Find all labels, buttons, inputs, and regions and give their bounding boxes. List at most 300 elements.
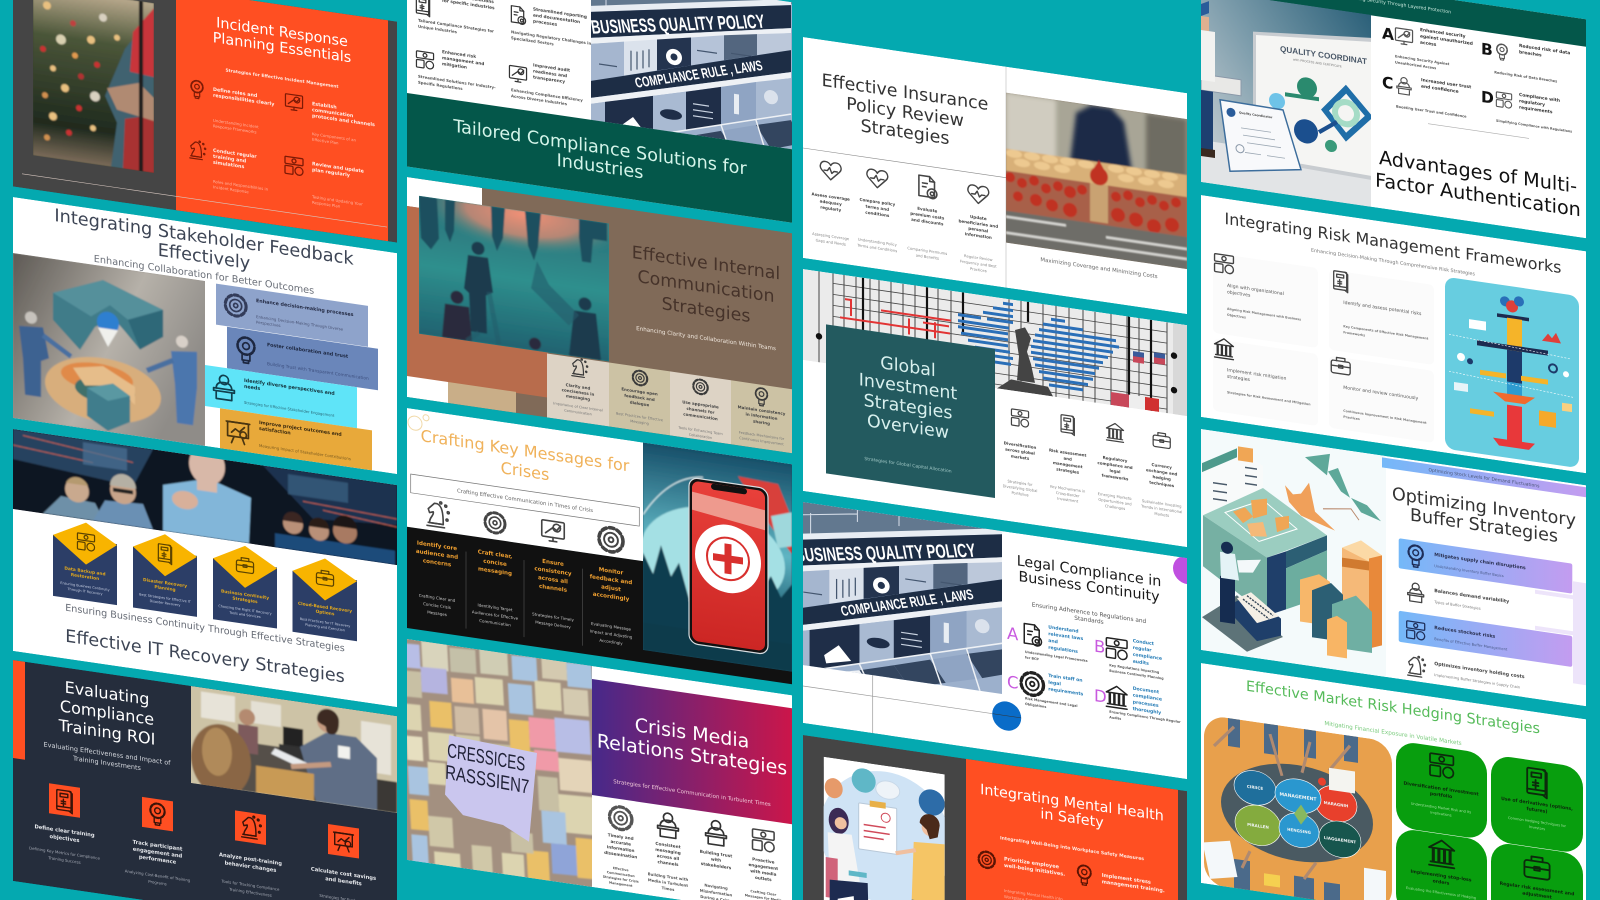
card: feedback: Messaging	[630, 419, 649, 426]
card: channels: Collaboration	[689, 433, 712, 440]
item: specific industries	[416, 0, 495, 40]
subheading: Enhancing Collaboration for Better Outcomes	[94, 254, 314, 297]
icons row	[427, 500, 623, 554]
card: data backup: Through IT Recovery	[66, 587, 103, 596]
item: risk	[1049, 413, 1087, 505]
item: regulatory	[1097, 421, 1133, 512]
title card: Strategies	[864, 391, 952, 424]
card: stop-loss: Implementing stop-loss	[1410, 869, 1472, 884]
item: media: outlets	[755, 875, 772, 882]
card: disaster recovery: Disaster Recovery	[150, 599, 180, 607]
card: identify: Identify and assess potential risks	[1343, 300, 1422, 317]
bar: stockout: Benefits of Effective Buffer Management	[1434, 637, 1508, 652]
item: behavior: Analyze post-training	[219, 852, 282, 867]
bar: supply chain: Mitigates supply chain disruptions	[1434, 552, 1526, 571]
card: stop-loss: Evaluating the Effectiveness of Hedging	[1406, 886, 1476, 900]
heading: Effectively	[158, 241, 250, 274]
item: information: Timely and	[608, 832, 634, 841]
item A: regulations	[1048, 645, 1078, 655]
heading: Buffer Strategies	[1410, 506, 1558, 547]
photo: figures shaking hands over blocks	[13, 253, 205, 446]
item A: A	[1382, 24, 1394, 44]
item: audit	[509, 59, 583, 109]
panel: Effective Internal Communication	[407, 177, 792, 453]
item: roles: Response Frameworks	[213, 123, 256, 135]
photo: team around strategy table: PIRALLEN	[1247, 822, 1269, 830]
subheading: Ensuring Adherence to Regulations and	[1032, 601, 1147, 625]
photo: wall of sticky notes: RASSSIEN7	[445, 762, 530, 799]
item D: Audits	[1109, 715, 1121, 721]
panel: Evaluating Compliance Training ROI	[13, 660, 397, 900]
header strip	[1382, 457, 1586, 497]
column: audience: Concise Crisis	[423, 601, 451, 610]
item A	[1007, 618, 1088, 669]
strip: collaboration	[227, 327, 378, 390]
card: derivatives: Common Hedging Techniques for	[1508, 816, 1567, 828]
subheading: Integrating Well-Being into Workplace Safety Measures	[1000, 835, 1144, 862]
photo: quality coordination certificate: QUALITY COORDINAT	[1280, 45, 1367, 66]
subheading: Training Investments	[72, 754, 142, 772]
subheading box	[411, 474, 639, 526]
photo: quality coordination certificate: Quality Coordinator	[1239, 111, 1273, 119]
item: beneficiaries: Regular Review	[964, 254, 993, 262]
item: training: Incident Response	[213, 184, 249, 194]
item: beneficiaries: Practices	[970, 267, 987, 273]
column: consistency	[532, 556, 574, 630]
item: stakeholders	[700, 818, 733, 900]
card: clarity: conciseness in	[562, 387, 595, 397]
subheading: Standards	[1074, 615, 1104, 626]
item: diversification	[1003, 408, 1037, 499]
item: communication: Key Components of an	[312, 131, 357, 143]
item B: audits	[1133, 659, 1149, 667]
column: messaging	[472, 547, 519, 629]
heading: Integrating Stakeholder Feedback	[54, 206, 354, 270]
card: derivatives: Investors	[1529, 825, 1545, 831]
item: behavior: Tools for Tracking Compliance	[221, 878, 280, 892]
item: reporting	[511, 3, 592, 52]
item: audit: Across Diverse Industries	[511, 93, 568, 106]
item B: Reducing Risk of Data Breaches	[1494, 70, 1557, 84]
strip: outcomes: Measuring Impact of Stakeholder Contributions	[259, 443, 351, 461]
item: diversification: Portfolios	[1011, 491, 1029, 497]
item: regulatory: frameworks	[1102, 473, 1129, 482]
column: messaging: Craft clear,	[478, 548, 512, 560]
item: risk: management	[1053, 460, 1083, 469]
item: information: dissemination	[604, 850, 637, 860]
item D: thoroughly	[1133, 706, 1161, 716]
item: well-being: well-being initiatives.	[1004, 863, 1065, 878]
heading: Industries	[557, 151, 643, 184]
item: compare: Understanding Policy	[858, 238, 898, 247]
column: feedback: Evaluating Message	[591, 621, 632, 632]
card: diversification: Implications	[1430, 810, 1452, 818]
photo: team around strategy table: MARAGNIH	[1324, 800, 1348, 809]
card: feedback: Best Practices for Effective	[616, 412, 663, 422]
item C: Obligations	[1025, 702, 1046, 709]
card: clarity	[547, 353, 609, 426]
column: audience: concerns	[423, 558, 452, 569]
title card: Global	[880, 353, 936, 381]
photo: business quality policy	[591, 0, 792, 150]
item: engagement	[125, 794, 191, 890]
item: savings: and benefits	[325, 876, 362, 887]
strip: perspectives: needs	[244, 384, 260, 392]
item B: Business Continuity Planning	[1109, 669, 1164, 681]
item C: Increased user trust	[1421, 77, 1471, 90]
item A: against unauthorized	[1420, 33, 1473, 47]
card: channels: communication	[683, 411, 718, 421]
item: training: Conduct regular	[213, 148, 257, 160]
item: specific industries: Tailored Compliance Strategies for	[418, 18, 494, 34]
subheading box: Crafting Effective Communication in Times of Crisis	[457, 487, 593, 514]
column: messaging: Identifying Target	[478, 602, 513, 612]
item: savings: Calculate cost savings	[311, 866, 376, 882]
item: coverage	[812, 159, 850, 247]
item: roles: responsibilities clearly	[213, 93, 275, 108]
item: roles	[191, 80, 275, 137]
card: diversification: Understanding Market Risk and Its	[1411, 802, 1471, 814]
item A: and	[1048, 638, 1058, 645]
heading: Effective Internal	[632, 243, 780, 284]
heading: Advantages of Multi-	[1379, 146, 1577, 198]
photo: compliance training room	[191, 686, 397, 813]
item D: D	[1481, 88, 1494, 108]
bar: stockout	[1399, 611, 1572, 667]
heading: Planning Essentials	[213, 30, 351, 66]
card: feedback: Encourage open	[621, 386, 658, 397]
strip: outcomes: satisfaction	[259, 426, 291, 437]
item: information	[603, 804, 639, 889]
column: consistency: Strategies for Timely	[532, 611, 574, 622]
subheading: Enhancing Clarity and Collaboration Within Teams	[636, 325, 776, 352]
card: monitor	[1329, 356, 1434, 443]
item: premium: Comparing Premiums	[907, 246, 947, 256]
strip: outcomes	[220, 408, 372, 470]
item: specific industries: Unique Industries	[418, 24, 458, 34]
item: risk: Cross-Border	[1056, 491, 1080, 498]
item B: Key Regulations Impacting	[1109, 663, 1160, 675]
item: review: Review and update	[312, 161, 365, 175]
strip: perspectives: Identify diverse perspectives and	[244, 378, 335, 397]
card: channels: Tools for Enhancing Team	[677, 425, 723, 436]
strip: collaboration: Building Trust with Transparent Communication	[267, 361, 369, 382]
card: diversification: Diversification of investment	[1403, 781, 1479, 798]
item: stress	[1078, 865, 1165, 897]
item: well-being	[979, 851, 1065, 900]
bar: demand	[1399, 574, 1572, 630]
card: disaster recovery	[133, 530, 197, 617]
item A: Understanding Legal Frameworks	[1025, 650, 1088, 663]
item: communication: protocols and channels	[312, 113, 375, 128]
item: behavior	[219, 808, 282, 899]
item: coverage: regularly	[820, 205, 841, 213]
item A: A	[1007, 624, 1019, 645]
item C: legal	[1048, 680, 1061, 688]
item: currency	[1140, 430, 1182, 520]
heading: Policy Review	[846, 94, 964, 131]
column: consistency: Message Delivery	[535, 619, 571, 630]
item B: breaches	[1519, 49, 1542, 59]
item: behavior: Training Effectiveness	[228, 886, 272, 898]
card: mitigation: strategies	[1227, 374, 1251, 383]
item A	[1382, 21, 1473, 76]
column: messaging: concise	[483, 558, 507, 568]
item D: Simplifying Compliance with Regulations	[1496, 119, 1572, 134]
panel: Effective Insurance Policy Review	[803, 37, 1187, 314]
heading: Crises	[501, 458, 549, 484]
card: consistency: sharing	[753, 419, 770, 426]
item A: relevant laws	[1048, 631, 1083, 642]
column: messaging: Audiences for Effective	[472, 609, 519, 621]
heading: Tailored Compliance Solutions for	[452, 117, 747, 180]
item: regulatory: legal	[1109, 468, 1121, 474]
item: communication: Establish	[312, 101, 337, 111]
item: coverage: Assessing Coverage	[812, 232, 850, 241]
item: consistent	[648, 810, 689, 894]
item: audit: transparency	[533, 74, 565, 85]
card: data backup: Restoration	[71, 572, 99, 582]
item: regulatory: compliance and	[1097, 460, 1133, 470]
bar: supply chain	[1399, 538, 1572, 594]
item: premium: and Benefits	[916, 253, 939, 261]
card: feedback: feedback and	[624, 393, 655, 402]
heading: Communication	[637, 267, 775, 307]
item: information: Management	[609, 880, 633, 888]
panel: Tailored Compliance Solutions	[407, 0, 801, 225]
panel: Optimizing Inventory Buffer Strategies	[1201, 429, 1586, 706]
item: risk: and	[1063, 456, 1072, 462]
card: align: Align with organizational	[1227, 283, 1284, 297]
subheading: Evaluating Effectiveness and Impact of	[44, 740, 171, 767]
item: premium: premium costs	[910, 211, 945, 221]
column: feedback: adjust	[601, 583, 621, 593]
item: premium	[907, 173, 947, 262]
title card: Overview	[867, 411, 949, 443]
item: review	[285, 156, 365, 212]
card: mitigation: Implement risk mitigation	[1227, 367, 1286, 382]
item: beneficiaries: information	[965, 231, 992, 240]
item: currency: Sustainable Investing	[1142, 499, 1182, 509]
item: premium: and discounts	[911, 217, 944, 227]
heading: Optimizing Inventory	[1392, 484, 1576, 531]
item: information: Effective	[613, 866, 629, 872]
card: business continuity: Strategies	[232, 596, 258, 605]
illustration: consultation with clipboard	[824, 756, 945, 900]
card: clarity: Importance of Clear Internal	[553, 401, 603, 413]
card: disaster recovery: Best Strategies for Effective IT	[139, 592, 192, 604]
item: risk: Specific Regulations	[418, 80, 463, 91]
item C: C	[1382, 73, 1393, 93]
item C: C	[1007, 672, 1019, 693]
caption: Maximizing Coverage and Minimizing Costs	[1040, 256, 1158, 280]
heading: in Safety	[1040, 806, 1104, 831]
bar: demand: Balances demand variability	[1434, 588, 1509, 605]
item A: Enhancing Security Against	[1395, 54, 1450, 66]
heading: Evaluating	[65, 678, 149, 709]
strip: perspectives: Strategies for Effective Stakeholder Engagement	[244, 401, 335, 418]
item A: Understand	[1048, 624, 1079, 635]
item: media: Crafting Clear	[750, 889, 777, 897]
item: coverage: Gaps and Needs	[816, 238, 846, 247]
column: audience: Crafting Clear and	[419, 593, 456, 603]
card: assessment	[1491, 841, 1583, 900]
card: align: objectives	[1227, 289, 1251, 299]
card: monitor: Monitor and review continuously	[1343, 385, 1419, 402]
card: mitigation: Strategies for Risk Assessment and Mitigation	[1227, 390, 1311, 407]
bar: holding costs: Optimizes inventory holding costs	[1434, 661, 1525, 680]
heading: Effective Insurance	[822, 71, 988, 115]
photo: quality coordination certificate: with PROCESS AND CERTIFICATE	[1293, 57, 1342, 69]
item: premium: Evaluate	[917, 206, 938, 214]
card: mitigation	[1213, 337, 1318, 426]
item: risk: Enhanced risk	[442, 49, 476, 60]
illustration: risk framework tower	[1445, 277, 1579, 468]
item D	[1094, 680, 1181, 730]
bar: demand: Types of Buffer Strategies	[1433, 600, 1481, 611]
item: consistent: Consistent	[655, 841, 681, 849]
item: coverage: adequacy	[820, 198, 842, 207]
photo: wall of sticky notes	[407, 639, 592, 887]
card: diversification: portfolio	[1430, 791, 1452, 800]
card: channels: channels for	[687, 406, 714, 415]
column: consistency: Ensure	[542, 558, 564, 568]
item B: B	[1094, 636, 1105, 657]
card: cloud recovery: Best Practices for IT Recovery	[300, 617, 350, 628]
title card: Investment	[859, 370, 957, 405]
panel: Effective IT Recovery Strategies	[13, 417, 397, 707]
photo: quality coordination certificate	[1201, 0, 1371, 207]
item: roles: Understanding Incident	[213, 118, 259, 129]
item: beneficiaries	[958, 183, 998, 275]
card: cloud recovery: Options	[316, 609, 335, 617]
item: consistent: messaging	[655, 847, 681, 855]
column: messaging: Communication	[479, 618, 511, 628]
item: diversification: Strategies for	[1007, 479, 1033, 487]
item: reporting: Specialized Sectors	[511, 35, 554, 47]
card: cloud recovery: Cloud-Based Recovery	[298, 601, 352, 615]
item: diversification: Diversifying Global	[1003, 484, 1037, 493]
photo: world map grid	[803, 269, 1187, 416]
column: feedback	[590, 565, 633, 647]
item B: regular	[1133, 645, 1152, 654]
item: currency: Trends in International	[1140, 504, 1182, 514]
item: information: Strategies for Crisis	[603, 875, 639, 884]
heading: Relations Strategies	[597, 730, 787, 780]
illustration: isometric warehouse	[1201, 429, 1386, 677]
item: review: Testing and Updating Your	[311, 194, 363, 207]
card: data backup: Ensuring Business Continuity	[60, 581, 110, 592]
heading: Strategies	[861, 116, 949, 149]
card: cloud recovery	[292, 554, 357, 641]
card: feedback	[609, 362, 670, 435]
item: risk: Risk assessment	[1049, 447, 1087, 458]
card: channels	[670, 371, 731, 444]
item: stakeholders: stakeholders	[701, 861, 732, 870]
item: consistent: Media in Turbulent	[648, 877, 688, 888]
item: objectives	[29, 780, 100, 868]
heading: Crisis Media	[635, 714, 749, 753]
item: stakeholders: with	[711, 856, 721, 863]
card: disaster recovery: Disaster Recovery	[143, 577, 187, 589]
heading: Business Continuity	[1018, 569, 1160, 606]
illustration: phone with medical cross	[643, 442, 792, 672]
item: well-being: Prioritize employee	[1004, 856, 1060, 870]
title card	[826, 324, 995, 498]
card: data backup: Data Backup and	[64, 566, 106, 578]
heading: Legal Compliance in	[1017, 553, 1161, 590]
item: beneficiaries: personal	[968, 226, 989, 234]
card: cloud recovery: Planning and Execution	[305, 623, 345, 632]
item: communication	[285, 94, 375, 151]
column: consistency: channels	[539, 583, 568, 594]
item C: and confidence	[1421, 83, 1459, 95]
card: business continuity: Tools and Services	[228, 610, 261, 619]
heading: Crafting Key Messages for	[421, 426, 630, 476]
item: media: engagement	[748, 862, 778, 871]
item: audit: readiness and	[533, 68, 567, 79]
item: communication: Effective Plan	[312, 137, 339, 146]
heading: Effective IT Recovery Strategies	[65, 627, 345, 687]
item C: Risk Management and Legal	[1025, 696, 1078, 708]
column: audience: Identify core	[417, 539, 457, 552]
item D: processes	[1133, 700, 1159, 709]
panel: Crafting Key Messages for Crises	[407, 408, 792, 685]
card: identify	[1329, 270, 1434, 365]
item: engagement: Track participant	[133, 839, 183, 853]
item: audit: Improved audit	[533, 62, 570, 74]
item C	[1382, 71, 1471, 119]
column: consistency: consistency	[534, 565, 572, 578]
item: audit: Enhancing Compliance Efficiency	[511, 87, 583, 103]
item: review: Response Plan	[312, 200, 341, 209]
strip: decision making: Perspectives	[256, 319, 281, 328]
card: diversification	[1396, 740, 1487, 840]
item: diversification: Diversification	[1004, 440, 1036, 450]
heading: Factor Authentication	[1375, 168, 1581, 221]
bar: holding costs	[1408, 655, 1525, 692]
panel: Advantages of Multi-Factor Authentication	[1201, 0, 1586, 238]
column: messaging: messaging	[478, 565, 512, 577]
item D: Document	[1133, 686, 1160, 696]
photo: team around strategy table: MANAGEMENT	[1279, 791, 1317, 803]
item: information: accurate	[610, 839, 631, 847]
item B: Conduct	[1133, 638, 1155, 647]
item: roles: Define roles and	[213, 87, 258, 99]
item: reporting: and documentation	[533, 12, 580, 25]
item: risk: Streamlined Solutions for Industry-	[418, 74, 496, 90]
item C: Train staff on	[1048, 673, 1083, 684]
card: clarity: Communication	[564, 408, 592, 416]
decorative purple circle	[1173, 554, 1201, 586]
column: audience	[416, 539, 458, 619]
item D: D	[1094, 686, 1107, 707]
card: assessment: Regular risk assessment and	[1500, 881, 1574, 898]
card: consistency: Feedback Mechanisms for	[739, 430, 785, 441]
heading: Training ROI	[58, 716, 155, 749]
item: engagement: Programs	[148, 879, 167, 886]
item: engagement: engagement and	[133, 846, 183, 860]
card: feedback: dialogue	[630, 400, 650, 407]
item: reporting: processes	[533, 19, 558, 28]
card: consistency: Continuous Improvement	[739, 436, 784, 447]
item: stakeholders: Building trust	[700, 849, 732, 858]
bar: stockout: Reduces stockout risks	[1434, 625, 1495, 640]
item D: requirements	[1519, 105, 1553, 115]
item: training	[190, 140, 269, 197]
item: objectives: Defining Key Metrics for Compliance	[29, 845, 100, 861]
item D: Ensuring Compliance Through Regular	[1109, 710, 1181, 724]
